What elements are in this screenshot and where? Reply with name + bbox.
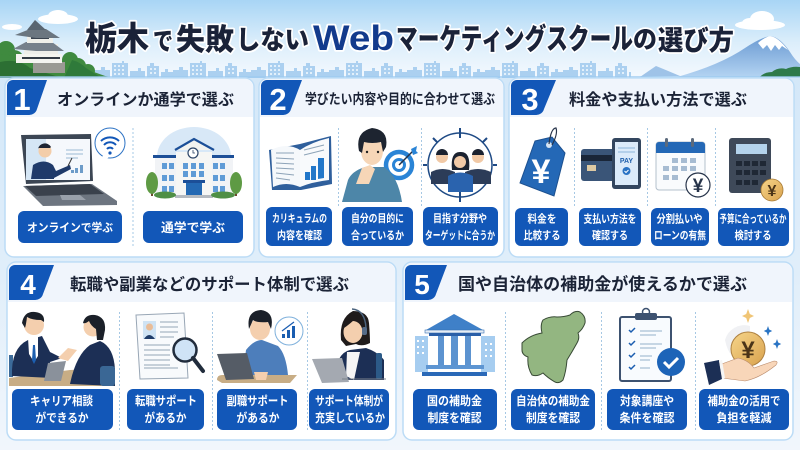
icon: school building xyxy=(146,127,242,198)
panel 4 number tab xyxy=(9,265,54,300)
icon: laptop with wifi xyxy=(21,128,125,206)
panel 5 heading: 国や自治体の補助金が使えるかで選ぶ xyxy=(458,274,747,294)
label: instalments: ローンの有無 xyxy=(654,228,706,242)
label: field and target: ターゲットに合うか xyxy=(425,228,495,242)
label: curriculum: カリキュラムの xyxy=(272,212,327,225)
label: side job support xyxy=(217,389,297,430)
panel 3 heading: 料金や支払い方法で選ぶ xyxy=(569,90,747,109)
label: curriculum xyxy=(266,207,332,246)
label: commute xyxy=(143,211,243,243)
label: payment method: 支払い方法を xyxy=(584,212,636,226)
label: own goals xyxy=(342,207,413,246)
icon: calendar and yen xyxy=(656,138,710,197)
label: national subsidy xyxy=(413,389,497,430)
icon: credit card and phone xyxy=(581,138,641,189)
label: eligible courses: 条件を確認 xyxy=(620,410,674,425)
label: side job support: 副職サポート xyxy=(226,393,288,408)
label: field and target: 目指す分野や xyxy=(433,211,487,225)
panel 3 header band xyxy=(510,79,793,117)
icon: open curriculum book xyxy=(269,136,332,190)
icon: yen price tag: ¥ xyxy=(532,153,551,191)
label: reduce burden: 補助金の活用で xyxy=(708,393,780,408)
label: support system: 充実しているか xyxy=(315,410,385,425)
label: instalments: 分割払いや xyxy=(656,212,702,226)
icon: thinking man with target xyxy=(342,128,418,202)
icon: credit card and phone: PAY xyxy=(620,158,633,165)
title: の xyxy=(633,26,657,54)
title: 栃木 xyxy=(85,20,149,57)
label: reduce burden xyxy=(699,389,789,430)
panel 5 number tab xyxy=(405,265,447,300)
label: budget xyxy=(718,208,789,246)
panel 2 number tab xyxy=(261,80,302,117)
label: reduce burden: 負担を軽減 xyxy=(716,410,772,425)
panel 1: online or commute xyxy=(5,78,254,257)
title: マーケティングスクール xyxy=(396,22,633,56)
panel 3 number tab: 3 xyxy=(521,82,539,117)
label: payment method: 確認する xyxy=(592,228,628,242)
label: local subsidy: 自治体の補助金 xyxy=(516,393,590,408)
label: compare fees: 料金を xyxy=(528,212,556,226)
icon: hand holding coin xyxy=(704,309,781,385)
panel 1 number tab: 1 xyxy=(13,82,31,117)
label: local subsidy: 制度を確認 xyxy=(526,410,580,425)
label: budget: 検討する xyxy=(734,228,772,242)
label: instalments xyxy=(651,208,709,246)
icon: calculator with coin xyxy=(729,138,783,201)
icon: calendar and yen: ¥ xyxy=(693,176,704,197)
panel 4 number tab: 4 xyxy=(20,269,36,300)
icon: hand holding coin: ¥ xyxy=(741,337,755,364)
label: career consultation: ができるか xyxy=(36,410,88,425)
panel 5 header band xyxy=(404,263,792,302)
label: online xyxy=(18,211,122,243)
panel 1 header band xyxy=(6,79,253,117)
label: compare fees: 比較する xyxy=(524,228,560,242)
panel 2 heading: 学びたい内容や目的に合わせて選ぶ xyxy=(305,91,495,107)
panel 1 number tab xyxy=(7,80,47,117)
panel 4: career support xyxy=(7,262,396,440)
label: job change support: 転職サポート xyxy=(135,393,197,408)
title: で xyxy=(153,28,173,56)
panel 3 number tab xyxy=(511,80,556,117)
icon: support operator xyxy=(312,309,386,383)
panel 4 heading: 転職や副業などのサポート体制で選ぶ xyxy=(70,274,349,294)
label: own goals: 自分の目的に xyxy=(351,211,404,225)
icon: Tochigi prefecture map xyxy=(522,311,585,383)
title xyxy=(85,19,734,58)
label: payment method xyxy=(579,208,641,246)
label: eligible courses: 対象講座や xyxy=(620,393,674,408)
panel 1 heading: オンラインか通学で選ぶ xyxy=(57,90,234,109)
label: compare fees xyxy=(515,208,568,246)
label: job change support: があるか xyxy=(144,410,186,425)
clouds xyxy=(2,10,785,30)
castle and trees xyxy=(0,20,108,78)
title: 選び方 xyxy=(658,26,734,56)
skyline xyxy=(95,58,631,78)
label: field and target xyxy=(423,207,498,246)
icon: target group xyxy=(423,128,497,202)
panel 4 header band xyxy=(8,263,395,302)
icon: calculator with coin: ¥ xyxy=(768,183,777,200)
title: 失敗 xyxy=(176,24,234,57)
panel 2 header band xyxy=(260,79,503,117)
icon: career consultation xyxy=(9,312,115,386)
label: career consultation xyxy=(12,389,113,430)
icon: side job worker with chart xyxy=(217,310,303,383)
mount fuji xyxy=(640,36,800,77)
title: しない xyxy=(236,25,309,55)
panel 2 number tab: 2 xyxy=(269,82,287,117)
panel 2: content and goals xyxy=(259,78,504,257)
header banner xyxy=(0,0,800,78)
panel 3: price and payment xyxy=(509,78,794,257)
label: own goals: 合っているか xyxy=(351,228,404,242)
icon: national government building xyxy=(415,314,495,376)
label: commute: 通学で学ぶ xyxy=(161,220,225,235)
label: curriculum: 内容を確認 xyxy=(277,228,322,242)
label: online: オンラインで学ぶ xyxy=(27,220,113,234)
label: support system: サポート体制が xyxy=(315,393,383,408)
label: local subsidy xyxy=(511,389,595,430)
label: support system xyxy=(309,389,389,430)
panel 5: subsidies xyxy=(403,262,793,440)
label: side job support: があるか xyxy=(236,410,280,425)
icon: CV and magnifier xyxy=(136,313,203,379)
label: job change support xyxy=(127,389,204,430)
label: eligible courses xyxy=(607,389,687,430)
label: career consultation: キャリア相談 xyxy=(30,393,93,408)
label: national subsidy: 国の補助金 xyxy=(427,393,482,408)
title: Web xyxy=(313,19,394,58)
icon: checklist with badge xyxy=(620,308,685,381)
icon: yen price tag xyxy=(520,128,565,196)
panel 5 number tab: 5 xyxy=(414,269,430,300)
label: national subsidy: 制度を確認 xyxy=(428,410,482,425)
